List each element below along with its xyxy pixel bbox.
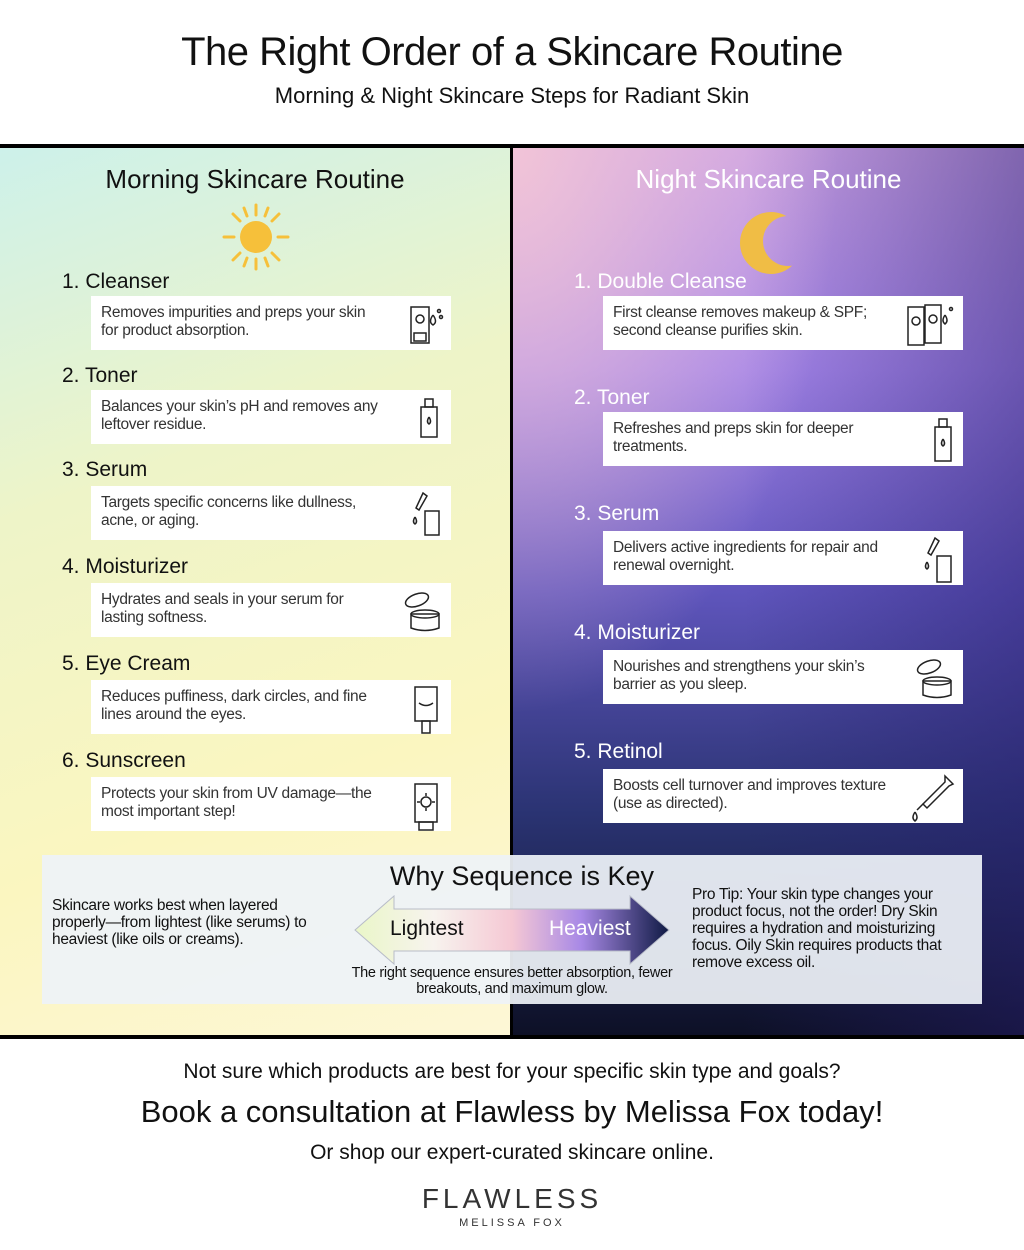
panel: night: [513, 148, 1024, 1036]
divider: [510, 148, 513, 1036]
step 3 serum: [62, 458, 451, 540]
night heading: Night Skincare Routine: [636, 164, 901, 194]
step 1 cleanser: Removes impurities and preps your skin for product absorption.: [101, 304, 365, 339]
step 4 moisturizer: Nourishes and strengthens your skin’s barrier as you sleep.: [613, 658, 864, 693]
pink corner overlay: [513, 148, 1024, 1036]
step 3 serum: 3. Serum: [574, 502, 659, 525]
step 2 toner: Balances your skin’s pH and removes any leftover residue.: [101, 398, 378, 433]
step 5 retinol: 5. Retinol: [574, 740, 663, 763]
step 2 toner: [62, 364, 451, 444]
step 1 double cleanse: First cleanse removes makeup & SPF; second cleanse purifies skin.: [613, 304, 867, 339]
label heaviest: Heaviest: [549, 917, 631, 940]
cta headline: Book a consultation at Flawless by Melissa Fox today!: [141, 1094, 883, 1129]
step 3 serum: Targets specific concerns like dullness, acne, or aging.: [101, 494, 356, 529]
step 1 double cleanse: 1. Double Cleanse: [574, 270, 747, 293]
top border: [0, 144, 1024, 148]
step 5 eye cream: 5. Eye Cream: [62, 652, 190, 675]
step 2 toner: [574, 386, 963, 466]
step 4 moisturizer: Hydrates and seals in your serum for lasting softness.: [101, 591, 343, 626]
pro tip: Pro Tip: Your skin type changes your product focus, not the order! Dry Skin requires a hydration and moisturizing focus. Oily Skin requires products that remove excess oil.: [692, 886, 941, 971]
morning heading: Morning Skincare Routine: [105, 164, 405, 194]
step 3 serum: [574, 502, 963, 585]
step 5 retinol: Boosts cell turnover and improves texture (use as directed).: [613, 777, 886, 812]
icon: moon: [740, 212, 792, 274]
step 2 toner: 2. Toner: [62, 364, 138, 387]
label lightest: Lightest: [390, 917, 464, 940]
arrow: lightest to heaviest: [354, 895, 670, 965]
bottom border: [0, 1035, 1024, 1039]
step 5 eye cream: [62, 652, 451, 734]
step 2 toner: 2. Toner: [574, 386, 650, 409]
subtitle: Morning & Night Skincare Steps for Radiant Skin: [275, 83, 749, 108]
step 1 cleanser: 1. Cleanser: [62, 270, 169, 293]
bottom text: The right sequence ensures better absorption, fewer breakouts, and maximum glow.: [352, 965, 672, 997]
panel: why sequence is key: [42, 855, 982, 1004]
title: The Right Order of a Skincare Routine: [181, 30, 843, 74]
logo: MELISSA FOX: [459, 1217, 565, 1229]
logo: FLAWLESS: [422, 1183, 602, 1214]
step 5 eye cream: Reduces puffiness, dark circles, and fine lines around the eyes.: [101, 688, 367, 723]
step 3 serum: 3. Serum: [62, 458, 147, 481]
step 1 double cleanse: [574, 270, 963, 350]
step 6 sunscreen: [62, 749, 451, 831]
icon: sun: [222, 204, 290, 270]
step 5 retinol: [574, 740, 963, 823]
step 3 serum: Delivers active ingredients for repair and renewal overnight.: [613, 539, 878, 574]
sequence heading: Why Sequence is Key: [390, 861, 654, 891]
panel: morning: [0, 148, 510, 1036]
step 4 moisturizer: [574, 621, 963, 704]
step 6 sunscreen: Protects your skin from UV damage—the most important step!: [101, 785, 372, 820]
step 4 moisturizer: 4. Moisturizer: [62, 555, 188, 578]
cta question: Not sure which products are best for your specific skin type and goals?: [183, 1060, 841, 1083]
cta shop: Or shop our expert-curated skincare online.: [310, 1141, 714, 1164]
left text: Skincare works best when layered properly—from lightest (like serums) to heaviest (like oils or creams).: [52, 897, 306, 948]
step 6 sunscreen: 6. Sunscreen: [62, 749, 186, 772]
logo: [422, 1183, 602, 1229]
step 1 cleanser: [62, 270, 451, 350]
step 4 moisturizer: 4. Moisturizer: [574, 621, 700, 644]
step 4 moisturizer: [62, 555, 451, 637]
step 2 toner: Refreshes and preps skin for deeper treatments.: [613, 420, 853, 455]
